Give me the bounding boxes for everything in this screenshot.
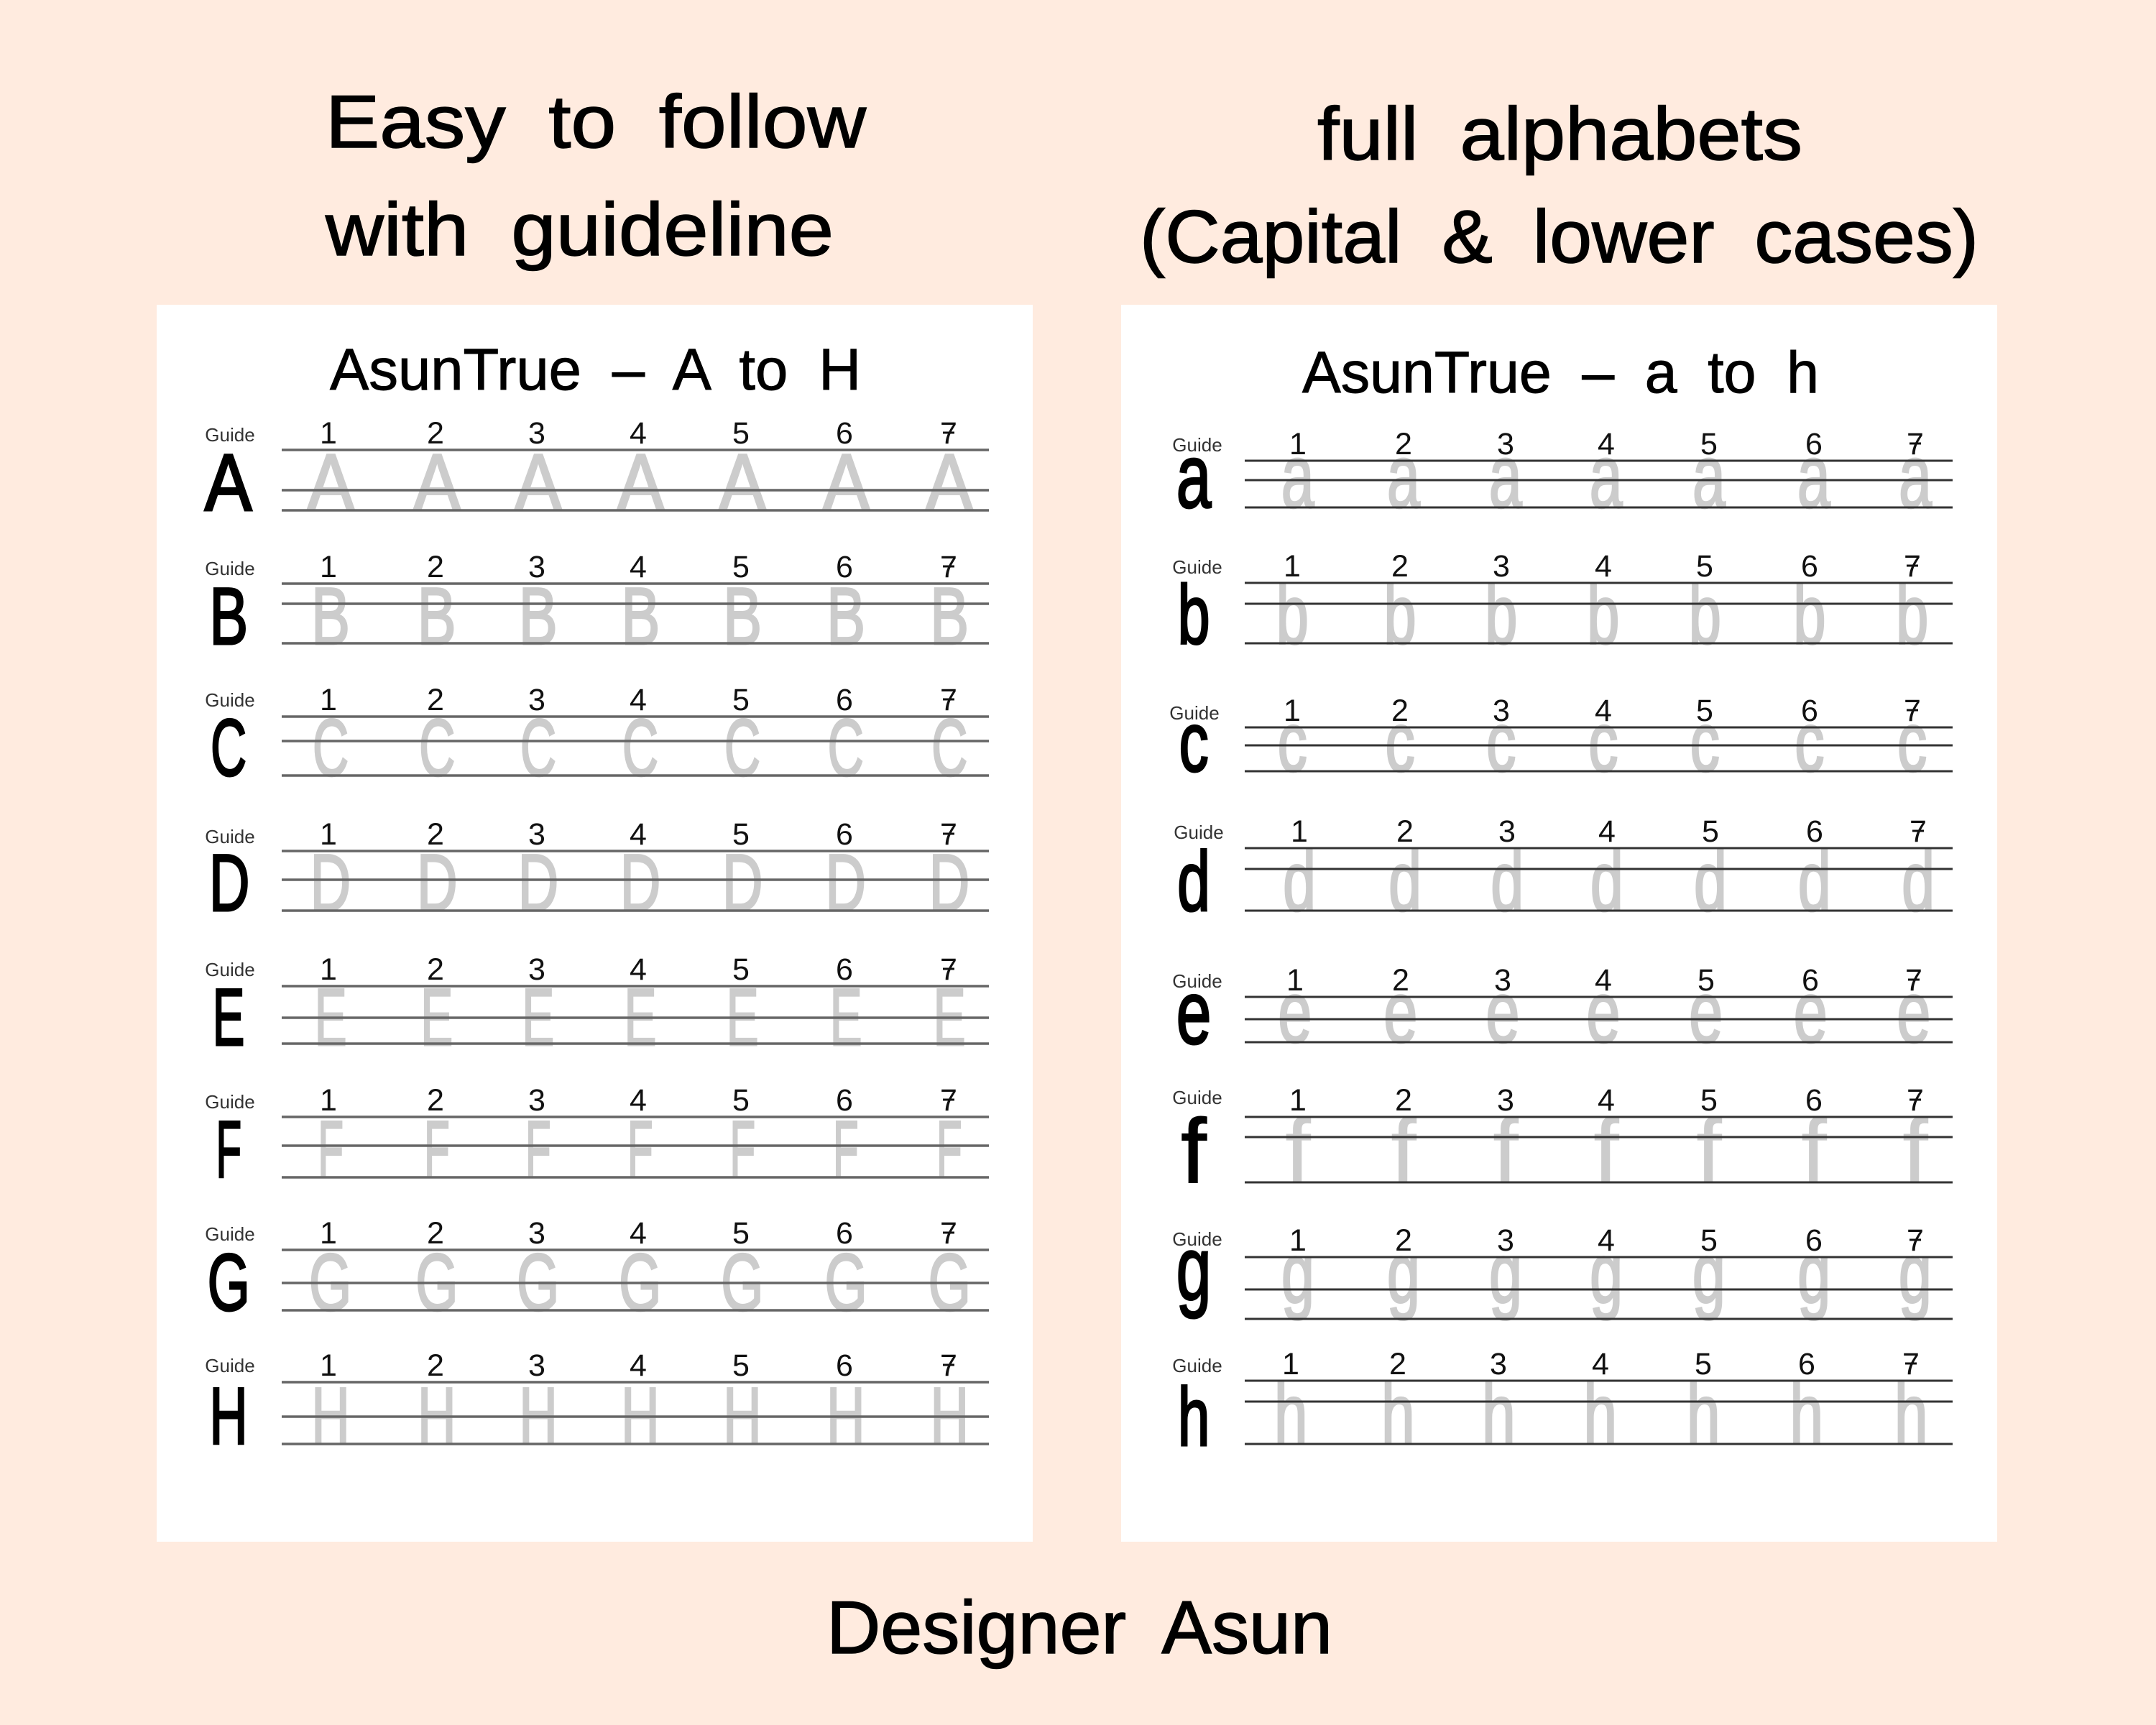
row: letter c: 1234567 xyxy=(1284,694,1921,728)
heading: full alphabets capital and lower cases: full alphabets xyxy=(1317,93,1802,176)
row: letter a: a xyxy=(1176,426,1211,527)
row: letter e: Guide xyxy=(1172,970,1222,992)
row: letter E: 1234567 xyxy=(320,952,957,987)
row: letter c: ccccccc xyxy=(1278,694,1927,789)
row: letter c: c xyxy=(1179,694,1209,789)
worksheet title: A to H: AsunTrue – A to H xyxy=(330,337,861,402)
row: letter e: e xyxy=(1176,962,1211,1063)
heading: easy to follow with guideline: Easy to follow xyxy=(326,80,867,164)
row: letter F: Guide xyxy=(205,1091,255,1113)
row: letter A: Guide xyxy=(205,424,255,446)
row: letter A: AAAAAAA xyxy=(307,438,973,528)
row: letter b: Guide xyxy=(1172,556,1222,578)
row: letter b: b xyxy=(1178,569,1210,661)
row: letter C xyxy=(205,683,989,793)
row: letter D: D xyxy=(209,838,250,928)
row: letter H: 1234567 xyxy=(320,1348,957,1383)
heading: easy to follow with guideline: with guideline xyxy=(325,188,834,272)
row: letter a: aaaaaaa xyxy=(1281,427,1932,527)
worksheet title: a to h: AsunTrue – a to h xyxy=(1302,340,1819,405)
row: letter H: HHHHHHH xyxy=(311,1372,969,1462)
row: letter H: H xyxy=(209,1372,248,1462)
row: letter B: B xyxy=(209,571,248,661)
row: letter h: h xyxy=(1178,1371,1210,1463)
row: letter G: GGGGGGG xyxy=(309,1238,971,1328)
row: letter e: eeeeeee xyxy=(1278,964,1930,1062)
heading: full alphabets capital and lower cases xyxy=(1140,93,1978,279)
row: letter F: FFFFFFF xyxy=(318,1104,962,1195)
row: letter f: fffffff xyxy=(1285,1100,1928,1202)
row: letter h: Guide xyxy=(1172,1355,1222,1376)
row: letter d: d xyxy=(1177,834,1210,929)
row: letter g: Guide xyxy=(1172,1228,1222,1250)
row: letter b: bbbbbbb xyxy=(1276,569,1928,661)
row: letter d xyxy=(1174,814,1953,929)
row: letter E xyxy=(205,952,989,1062)
footer: designer credit: Designer Asun xyxy=(826,1586,1332,1670)
row: letter G xyxy=(205,1216,989,1328)
row: letter b: 1234567 xyxy=(1284,549,1921,584)
row: letter e: 1234567 xyxy=(1286,963,1922,998)
row: letter d: ddddddd xyxy=(1283,834,1935,929)
row: letter F xyxy=(205,1083,989,1195)
row: letter h: hhhhhhh xyxy=(1274,1366,1928,1462)
row: letter E: EEEEEEE xyxy=(315,972,966,1062)
row: letter b xyxy=(1172,549,1953,661)
row: letter d: Guide xyxy=(1174,822,1224,843)
row: letter B: BBBBBBB xyxy=(311,571,969,661)
row: letter C: 1234567 xyxy=(320,683,957,717)
row: letter F: F xyxy=(216,1104,241,1195)
row: letter f: Guide xyxy=(1172,1087,1222,1108)
row: letter G: Guide xyxy=(205,1223,255,1245)
row: letter A: 1234567 xyxy=(320,416,957,451)
heading: full alphabets capital and lower cases: (Capital & lower cases) xyxy=(1140,196,1978,279)
row: letter h: 1234567 xyxy=(1282,1347,1920,1381)
row: letter g: g xyxy=(1176,1218,1211,1319)
panel: uppercase worksheet A to H xyxy=(157,305,1033,1542)
row: letter g: 1234567 xyxy=(1289,1223,1924,1258)
panel: lowercase worksheet a to h xyxy=(1121,305,1997,1542)
row: letter C: Guide xyxy=(205,689,255,711)
row: letter G: 1234567 xyxy=(320,1216,957,1251)
row: letter C: CCCCCCC xyxy=(313,703,967,793)
row: letter a: Guide xyxy=(1172,434,1222,456)
row: letter D xyxy=(205,817,989,928)
heading: easy to follow with guideline xyxy=(325,80,867,272)
row: letter H: Guide xyxy=(205,1355,255,1376)
row: letter f: 1234567 xyxy=(1289,1083,1924,1118)
row: letter B: 1234567 xyxy=(320,550,957,584)
row: letter a: 1234567 xyxy=(1289,427,1924,461)
row: letter A xyxy=(205,416,989,528)
row: letter E: E xyxy=(213,972,244,1062)
row: letter F: 1234567 xyxy=(320,1083,957,1118)
row: letter g: ggggggg xyxy=(1281,1225,1932,1320)
row: letter H xyxy=(205,1348,989,1462)
row: letter A: A xyxy=(205,438,252,528)
row: letter D: DDDDDDD xyxy=(310,838,969,928)
row: letter h xyxy=(1172,1347,1953,1463)
row: letter d: 1234567 xyxy=(1291,814,1927,849)
row: letter E: Guide xyxy=(205,959,255,980)
row: letter D: Guide xyxy=(205,826,255,847)
row: letter B xyxy=(205,550,989,661)
row: letter G: G xyxy=(208,1238,250,1328)
row: letter D: 1234567 xyxy=(320,817,957,852)
row: letter B: Guide xyxy=(205,558,255,579)
row: letter c: Guide xyxy=(1169,702,1220,724)
row: letter C: C xyxy=(211,703,247,793)
row: letter f: f xyxy=(1181,1100,1207,1202)
